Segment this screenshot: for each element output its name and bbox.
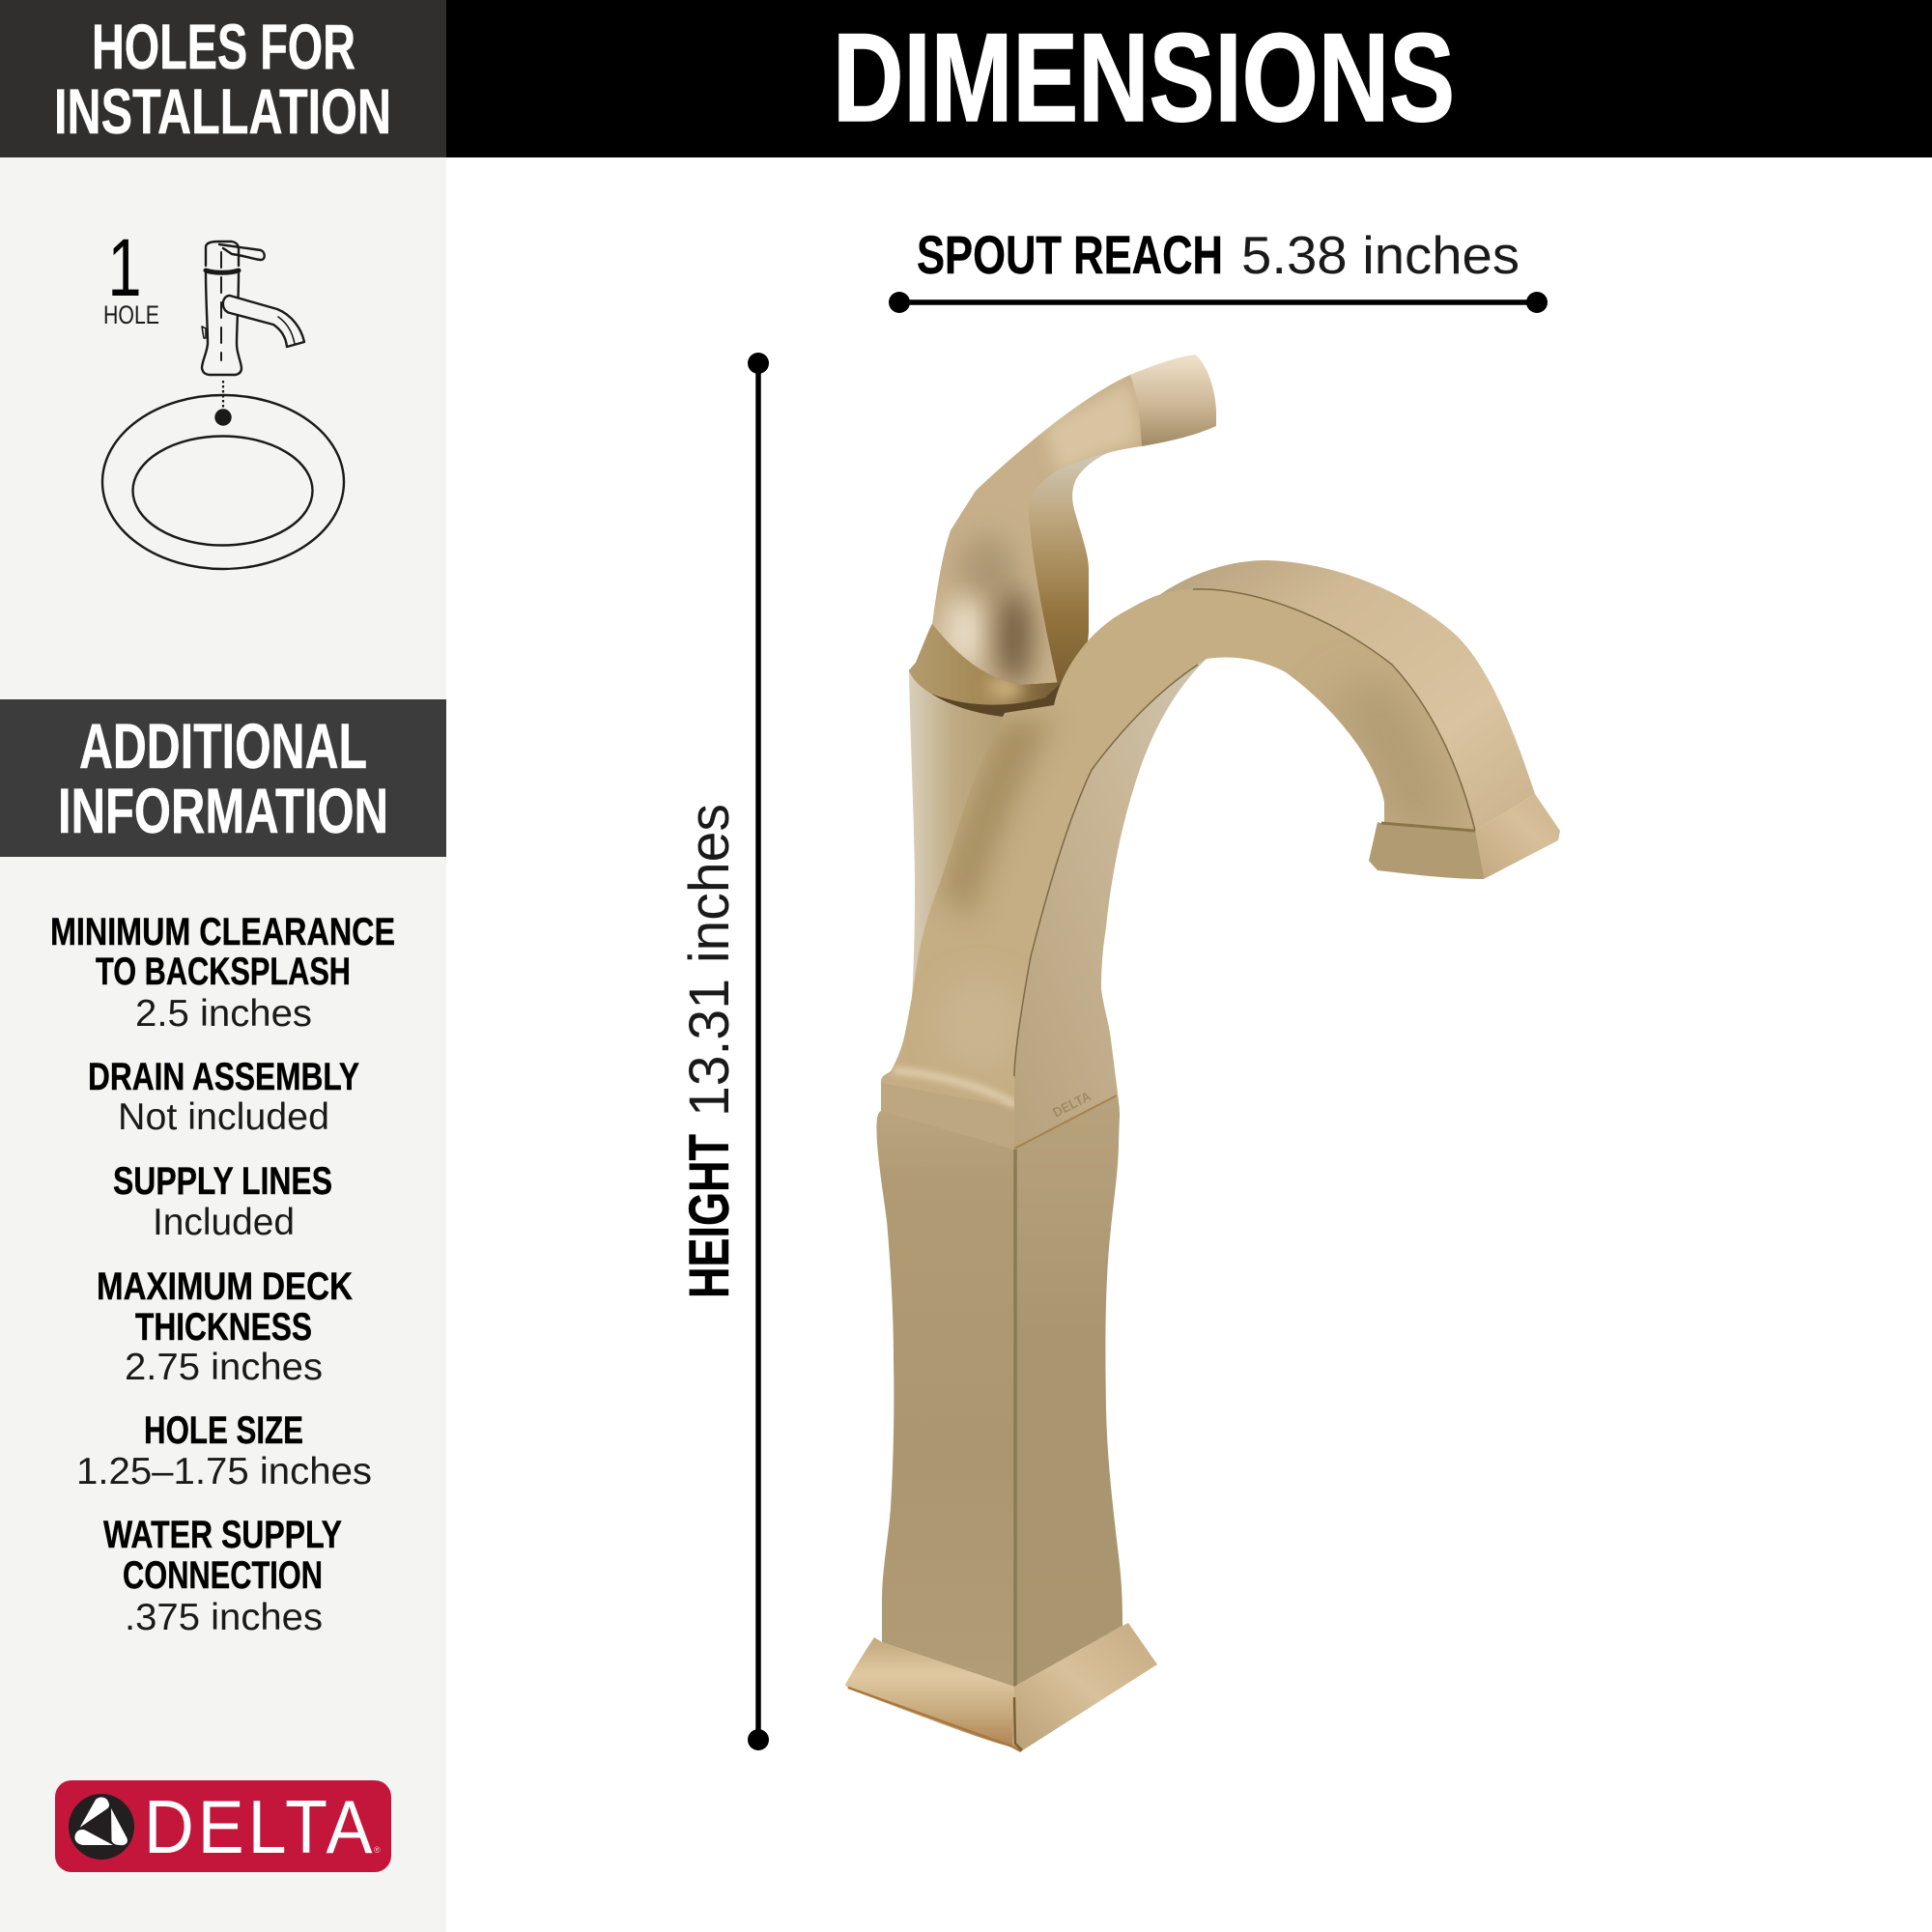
faucet body right face — [1014, 1096, 1122, 1687]
icon: one hole count — [103, 222, 159, 329]
header: holes for installation: INSTALLATION — [54, 75, 391, 147]
product photo: faucet — [845, 355, 1560, 1751]
text block: minimum clearance — [50, 911, 395, 1035]
faucet handle lever — [932, 371, 1143, 685]
text block: water supply connection: .375 inches — [125, 1597, 323, 1638]
faucet column — [909, 670, 1058, 997]
text block: water supply connection: CONNECTION — [123, 1554, 323, 1597]
faucet body top seam — [1014, 1095, 1117, 1149]
panel: left sidebar — [0, 0, 446, 1932]
faucet base right face — [1012, 1623, 1157, 1751]
logo: Delta: DELTA — [144, 1784, 372, 1869]
faucet handle stem — [1024, 446, 1125, 688]
faucet base corner — [1014, 1697, 1022, 1750]
faucet collar shadow ring — [909, 624, 1067, 717]
dimension: height label: 13.31 inches — [678, 804, 741, 1117]
faucet collar — [909, 624, 1061, 705]
header bar: dimensions: DIMENSIONS — [833, 7, 1455, 148]
spout front face and neck — [869, 580, 1488, 1159]
faucet base left face — [845, 1637, 1014, 1747]
header: additional information: INFORMATION — [58, 775, 388, 846]
dimension: height label — [678, 804, 741, 1298]
header: holes for installation: HOLES FOR — [92, 11, 355, 82]
text block: minimum clearance: MINIMUM CLEARANCE — [50, 911, 395, 953]
faucet body left face — [876, 1111, 1014, 1687]
text block: drain assembly: Not included — [118, 1096, 329, 1138]
spout ridge line — [1014, 589, 1484, 1076]
text block: drain assembly: DRAIN ASSEMBLY — [88, 1056, 359, 1098]
dimension: spout reach label — [917, 224, 1520, 285]
text block: supply lines: SUPPLY LINES — [113, 1160, 332, 1203]
arrow: height dimension line — [748, 353, 769, 1750]
spout tip crease — [1381, 823, 1475, 831]
text block: hole size — [76, 1409, 372, 1492]
text block: water supply connection — [103, 1514, 342, 1638]
faucet base lip — [848, 1688, 1021, 1751]
arrow: spout reach dimension line — [889, 292, 1548, 313]
text block: maximum deck thickness — [97, 1265, 353, 1388]
spout tip front flange — [1369, 822, 1484, 879]
faucet body corner edge — [1013, 1150, 1017, 1687]
text block: hole size: HOLE SIZE — [144, 1409, 303, 1452]
text block: supply lines: Included — [153, 1202, 295, 1243]
text block: supply lines — [113, 1160, 332, 1243]
embossed Delta mark: DELTA — [1050, 1088, 1094, 1121]
icon: one hole count: HOLE — [103, 300, 159, 329]
header: holes for installation — [0, 0, 446, 157]
spout top face — [1159, 560, 1535, 831]
logo: Delta: ® — [374, 1845, 381, 1855]
header bar: dimensions — [446, 0, 1932, 157]
spout tip side flange — [1475, 794, 1560, 879]
text block: minimum clearance: 2.5 inches — [135, 993, 312, 1035]
text block: water supply connection: WATER SUPPLY — [103, 1514, 342, 1556]
text block: hole size: 1.25–1.75 inches — [76, 1451, 372, 1492]
header: additional information: ADDITIONAL — [79, 710, 367, 781]
icon: one hole count: 1 — [107, 222, 142, 313]
icon: faucet line drawing over sink — [102, 242, 344, 569]
dimension: spout reach label: 5.38 inches — [1241, 225, 1520, 285]
dimension: spout reach label: SPOUT REACH — [917, 224, 1223, 285]
header: additional information — [0, 699, 446, 857]
text block: maximum deck thickness: THICKNESS — [135, 1306, 312, 1349]
dimension: height label: HEIGHT — [678, 1134, 741, 1298]
text block: maximum deck thickness: MAXIMUM DECK — [97, 1265, 353, 1308]
logo: Delta — [55, 1780, 391, 1872]
spout underside — [1014, 659, 1207, 1154]
text block: maximum deck thickness: 2.75 inches — [125, 1347, 323, 1388]
faucet handle tip — [1130, 355, 1216, 446]
text block: drain assembly — [88, 1056, 359, 1138]
text block: minimum clearance: TO BACKSPLASH — [96, 951, 351, 993]
